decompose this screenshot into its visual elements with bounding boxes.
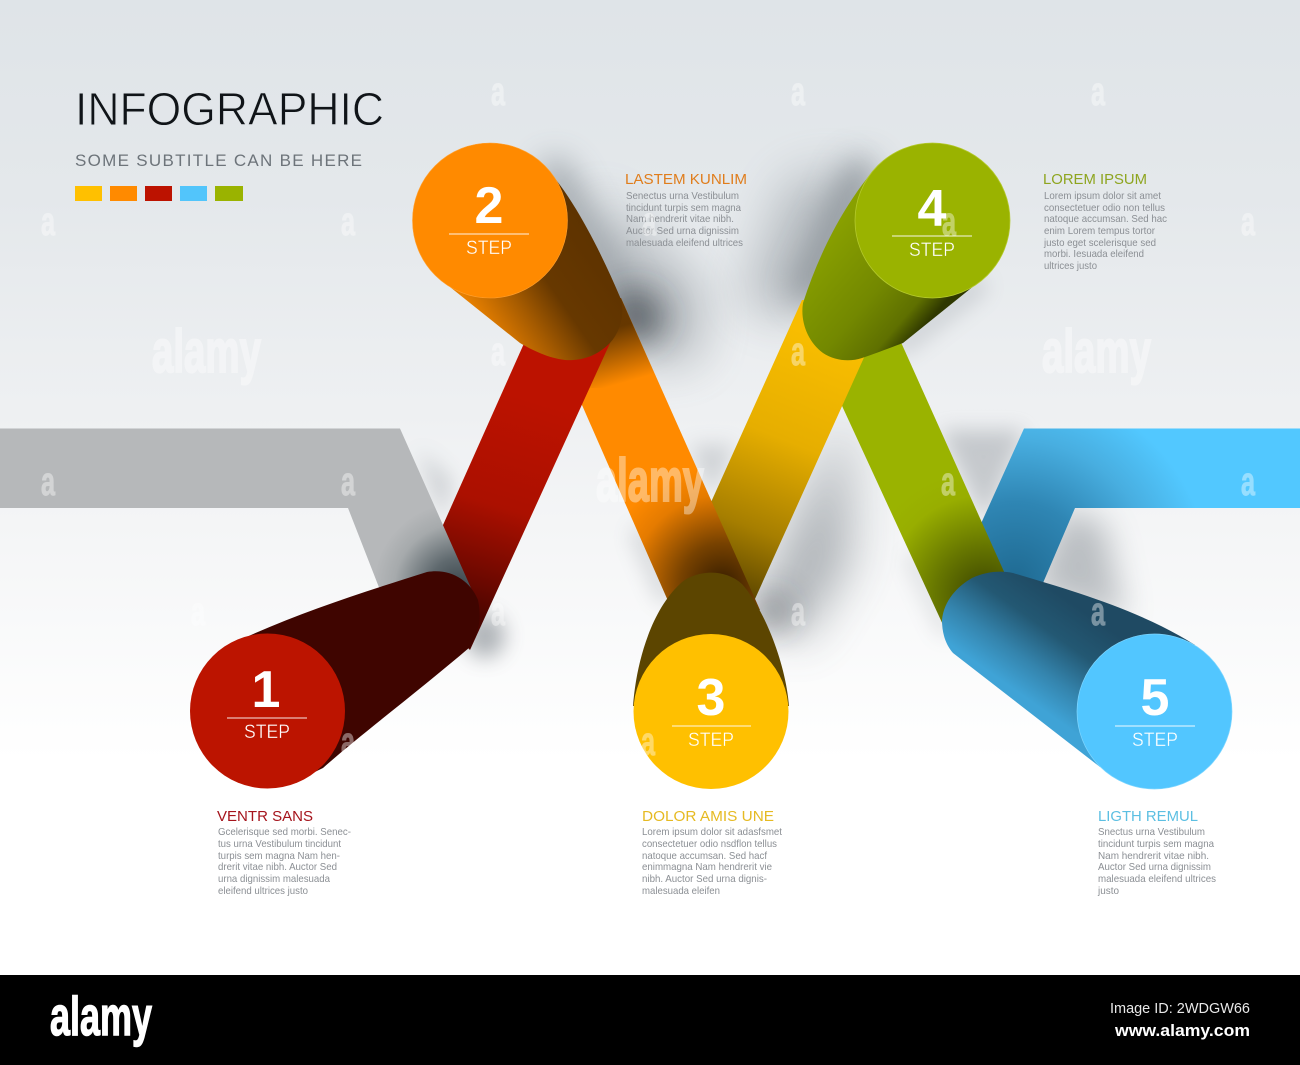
cylinder 4 body	[802, 172, 975, 360]
step 3 label: STEP	[688, 730, 734, 751]
body: step 4: ultrices justo	[1044, 261, 1097, 272]
watermarks: alamy	[596, 447, 704, 514]
heading: step 3: DOLOR AMIS UNE	[642, 808, 774, 825]
blue outgoing band	[960, 428, 1300, 590]
watermarks: a	[341, 460, 355, 504]
watermarks: a	[791, 590, 805, 634]
body: step 5: justo	[1097, 886, 1119, 897]
watermarks: a	[791, 70, 805, 114]
watermarks: a	[491, 590, 505, 634]
body: step 1: drerit vitae nibh. Auctor Sed	[218, 862, 337, 873]
body: step 5: Auctor Sed urna dignissim	[1098, 862, 1211, 873]
subtitle: SOME SUBTITLE CAN BE HERE	[75, 151, 362, 170]
body: step 3: nibh. Auctor Sed urna dignis-	[642, 874, 767, 885]
footer bar	[0, 975, 1300, 1065]
text block: step 2	[625, 171, 747, 249]
body: step 1: Gcelerisque sed morbi. Senec-	[218, 827, 351, 838]
image id: Image ID: 2WDGW66	[1110, 1000, 1250, 1017]
step 5 number: 5	[1141, 669, 1169, 727]
body: step 1: urna dignissim malesuada	[218, 874, 330, 885]
cylinder 5	[942, 572, 1232, 789]
step 3 number: 3	[697, 669, 725, 727]
heading: step 1: VENTR SANS	[217, 808, 313, 825]
text block: step 3	[642, 808, 782, 897]
step 1 label: STEP	[244, 722, 290, 743]
text block: step 4	[1043, 171, 1167, 272]
step 1 number: 1	[252, 661, 280, 719]
footer logo: alamy	[50, 985, 152, 1047]
watermarks: a	[942, 200, 956, 244]
body: step 4: natoque accumsan. Sed hac	[1044, 214, 1167, 225]
body: step 4: enim Lorem tempus tortor	[1044, 226, 1155, 237]
body: step 3: enimmagna Nam hendrerit vie	[642, 862, 772, 873]
watermarks	[41, 70, 1255, 764]
cylinder 1 body	[240, 571, 480, 783]
body: step 4: Lorem ipsum dolor sit amet	[1044, 191, 1161, 202]
body: step 1: eleifend ultrices justo	[218, 886, 308, 897]
body: step 2: malesuada eleifend ultrices	[626, 238, 743, 249]
body: step 1: tus urna Vestibulum tincidunt	[218, 839, 341, 850]
heading: step 2: LASTEM KUNLIM	[625, 171, 747, 188]
body: step 2: Senectus urna Vestibulum	[626, 191, 739, 202]
watermarks: a	[641, 720, 655, 764]
watermarks: a	[41, 460, 55, 504]
body: step 5: Nam hendrerit vitae nibh.	[1098, 851, 1209, 862]
step 2 label: STEP	[466, 238, 512, 259]
step 4 label: STEP	[909, 240, 955, 261]
ribbon: green step 4 to 5	[803, 320, 1010, 640]
cylinder 5 body	[942, 572, 1195, 767]
watermarks: a	[1091, 590, 1105, 634]
body: step 3: consectetuer odio nsdflon tellus	[642, 839, 777, 850]
step 2 number: 2	[475, 177, 503, 235]
cylinder 3 body	[633, 573, 789, 706]
body: step 4: consectetuer odio non tellus	[1044, 203, 1165, 214]
body: step 2: Auctor Sed urna dignissim	[626, 226, 739, 237]
text block: step 1	[217, 808, 351, 897]
drop shadows	[418, 170, 1125, 658]
ribbon: yellow step 3 to 4	[667, 300, 890, 610]
step 4 face	[855, 143, 1010, 298]
step 3 face	[634, 634, 788, 789]
cylinder 4	[802, 143, 1010, 360]
watermarks: a	[341, 720, 355, 764]
body: step 4: justo eget scelerisque sed	[1043, 238, 1156, 249]
watermarks: a	[1091, 70, 1105, 114]
watermarks: a	[642, 200, 656, 244]
watermarks: a	[191, 590, 205, 634]
grey incoming band	[0, 428, 475, 597]
body: step 1: turpis sem magna Nam hen-	[218, 851, 340, 862]
watermarks: a	[941, 460, 955, 504]
watermarks: alamy	[152, 318, 261, 385]
body: step 5	[1097, 827, 1216, 897]
step 5 face	[1077, 634, 1232, 789]
ribbon: red step 1 to 2	[414, 330, 616, 650]
colour legend swatches	[75, 186, 243, 201]
body: step 3: natoque accumsan. Sed hacf	[642, 851, 767, 862]
watermarks: a	[1241, 460, 1255, 504]
heading: step 5: LIGTH REMUL	[1098, 808, 1198, 825]
cylinder 2	[412, 143, 622, 360]
watermarks: a	[491, 70, 505, 114]
watermarks: a	[1241, 200, 1255, 244]
website: www.alamy.com	[1114, 1021, 1250, 1040]
body: step 1	[218, 827, 351, 897]
body: step 3: Lorem ipsum dolor sit adasfsmet	[642, 827, 782, 838]
text block: step 5	[1097, 808, 1216, 897]
body: step 5: Snectus urna Vestibulum	[1098, 827, 1205, 838]
heading: step 4: LOREM IPSUM	[1043, 171, 1147, 188]
cylinder 2 body	[450, 162, 622, 360]
title: INFOGRAPHIC	[75, 83, 384, 135]
ribbon: orange step 2 to 3	[535, 298, 760, 610]
step 5 label: STEP	[1132, 730, 1178, 751]
body: step 5: malesuada eleifend ultrices	[1098, 874, 1216, 885]
body: step 2: Nam hendrerit vitae nibh.	[626, 214, 734, 225]
watermarks: alamy	[1042, 318, 1151, 385]
watermarks: a	[491, 330, 505, 374]
body: step 4	[1043, 191, 1167, 272]
watermarks: a	[791, 330, 805, 374]
step 1 face	[190, 634, 345, 788]
body: step 4: morbi. Iesuada eleifend	[1044, 249, 1144, 260]
body: step 3	[642, 827, 782, 897]
step 2 face	[412, 143, 568, 298]
step 4 number: 4	[918, 180, 947, 238]
body: step 3: malesuada eleifen	[642, 886, 720, 897]
body: step 5: tincidunt turpis sem magna	[1098, 839, 1214, 850]
cylinder 3	[633, 573, 789, 789]
watermarks: a	[341, 200, 355, 244]
body: step 2	[626, 191, 743, 249]
watermarks: a	[41, 200, 55, 244]
body: step 2: tincidunt turpis sem magna	[626, 203, 741, 214]
cylinder 1	[190, 571, 480, 788]
